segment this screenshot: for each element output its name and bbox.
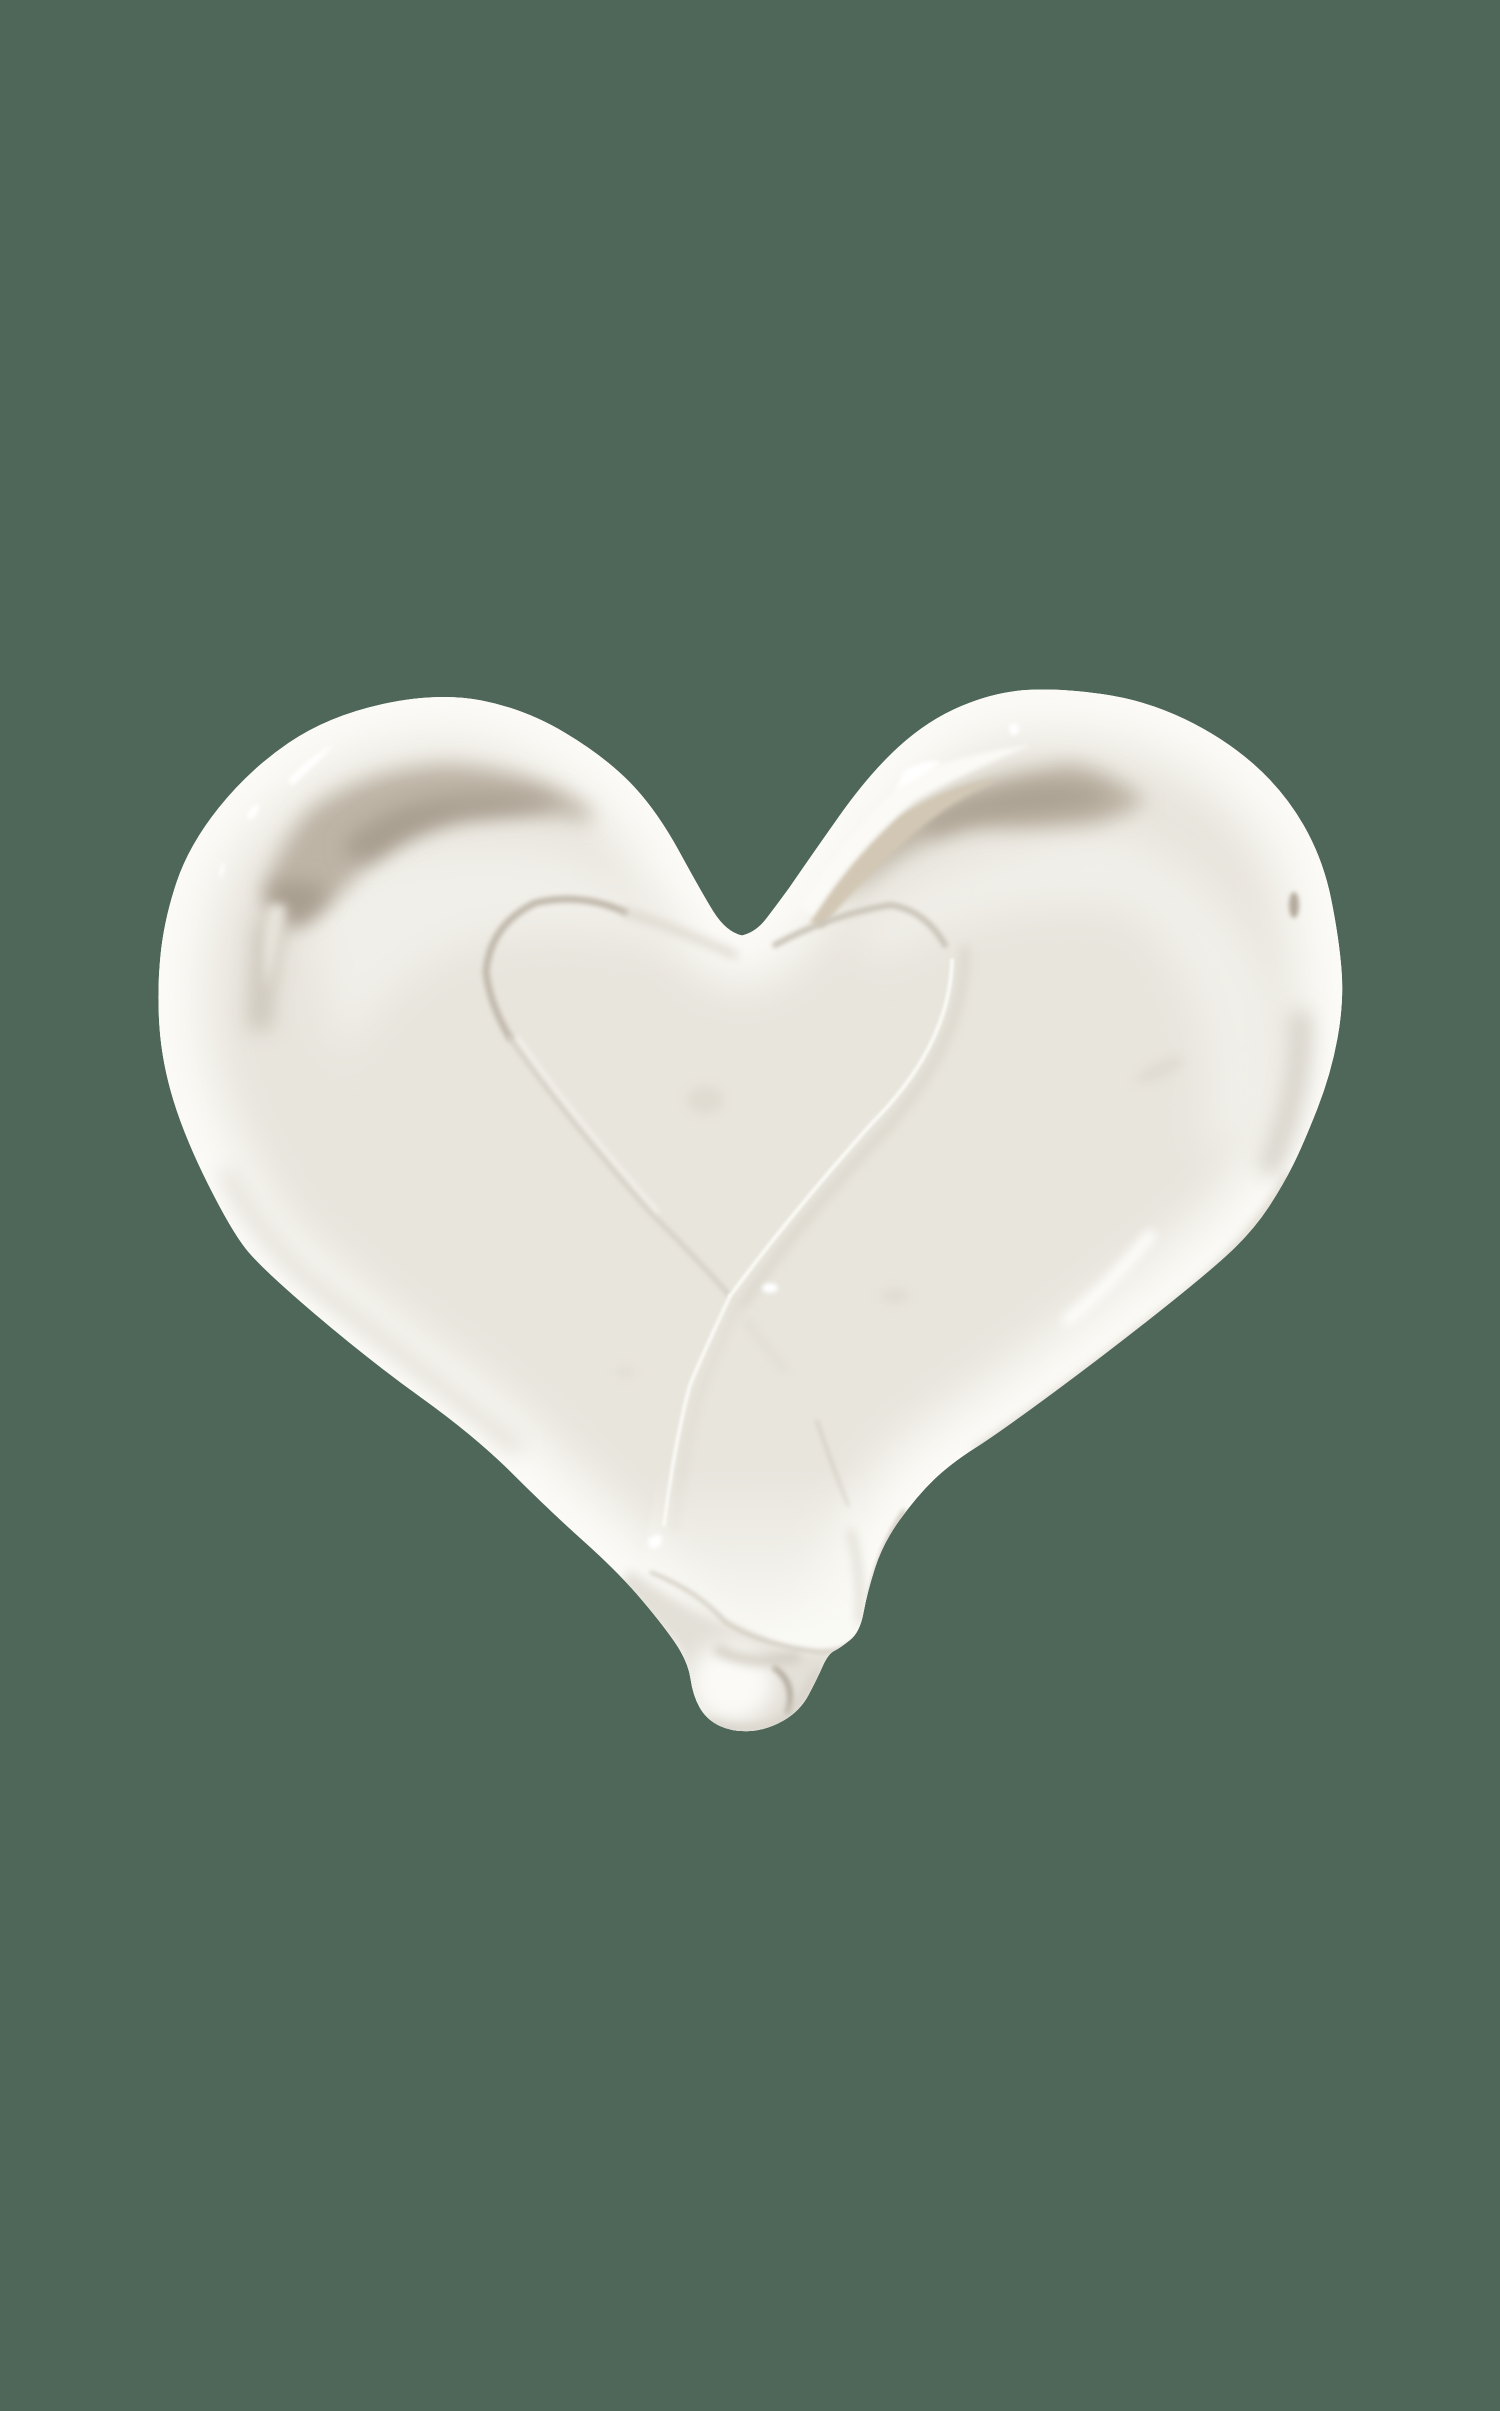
soft glow below the upper lobes bbox=[321, 854, 622, 1014]
lower right edge shadow bbox=[975, 1175, 1290, 1452]
upper-left cavity shadow bbox=[248, 765, 593, 1030]
raised bright rim bbox=[158, 690, 1342, 1731]
background and cream heart illustration bbox=[158, 690, 1342, 1732]
flap edge line bbox=[650, 1572, 860, 1652]
upper flap above drip bbox=[640, 1470, 870, 1647]
lower right bright streak bbox=[1068, 1236, 1150, 1320]
surface shading clipped to heart bbox=[158, 690, 1342, 1735]
crisp outer rim bbox=[158, 690, 1342, 1731]
dent at right rim bbox=[1289, 892, 1299, 918]
right ridge beside the flap bbox=[850, 1530, 860, 1625]
cream heart bbox=[158, 690, 1342, 1735]
inner drawn heart outline bbox=[486, 899, 965, 1530]
glossy highlights bbox=[218, 723, 1019, 1548]
heart base shape bbox=[158, 690, 1342, 1731]
right rim shading bbox=[1270, 1020, 1300, 1165]
drip lower body bbox=[620, 1570, 840, 1735]
small surface smudges bbox=[617, 1052, 1187, 1376]
upper-right cavity shadow bbox=[800, 745, 1145, 928]
drop crease bbox=[775, 1668, 790, 1712]
lower-left edge soft shade bbox=[225, 1170, 520, 1450]
drop highlight bbox=[690, 1642, 774, 1722]
drop underside shade bbox=[705, 1670, 820, 1730]
